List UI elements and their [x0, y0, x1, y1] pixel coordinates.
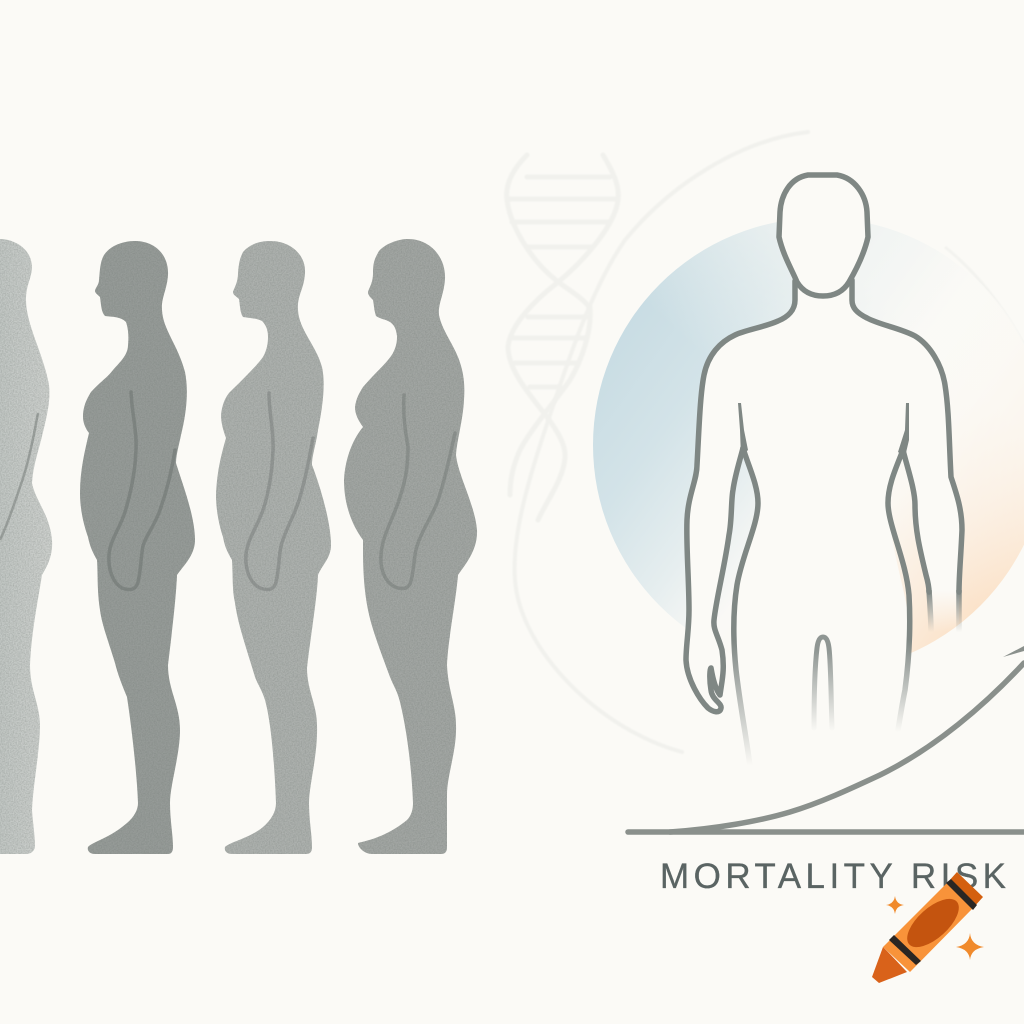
- faint background arc: right sweep: [945, 247, 1024, 345]
- crotch line: [814, 637, 832, 728]
- right inner arm: [903, 450, 929, 592]
- left torso side: [734, 448, 758, 766]
- risk chart axis: [628, 829, 1024, 835]
- icon: orange crayon: [872, 872, 983, 983]
- right inner arm fade: [929, 590, 931, 632]
- right outer arm fade: [956, 590, 962, 632]
- gradient disc behind outline figure: [592, 217, 1024, 673]
- faint dna helix: [507, 155, 618, 520]
- arrowhead stroke: [1003, 646, 1024, 657]
- silhouette 2: dark figure: [80, 241, 195, 854]
- silhouette 3: mid-grey figure: [216, 241, 331, 854]
- icon: small sparkle: [886, 896, 904, 914]
- left shoulder, arm and hand: [686, 281, 795, 712]
- silhouette 1: cropped faded figure: [0, 239, 52, 854]
- left armpit spike: [738, 403, 748, 457]
- icon: large sparkle: [956, 933, 984, 960]
- body fill: torso and left arm: [686, 280, 948, 768]
- body fill: lower right arm: [903, 450, 962, 632]
- faint background arc: left sweep: [515, 132, 808, 752]
- right shoulder and outer arm: [852, 280, 962, 592]
- head outline: [779, 175, 868, 296]
- silhouette 4: largest figure: [344, 239, 477, 854]
- rising risk curve: [670, 663, 1024, 832]
- label: mortality risk: MORTALITY RISK: [660, 857, 1006, 896]
- right torso side: [888, 450, 910, 730]
- right armpit spike: [898, 403, 909, 457]
- outline human figure: [686, 175, 962, 768]
